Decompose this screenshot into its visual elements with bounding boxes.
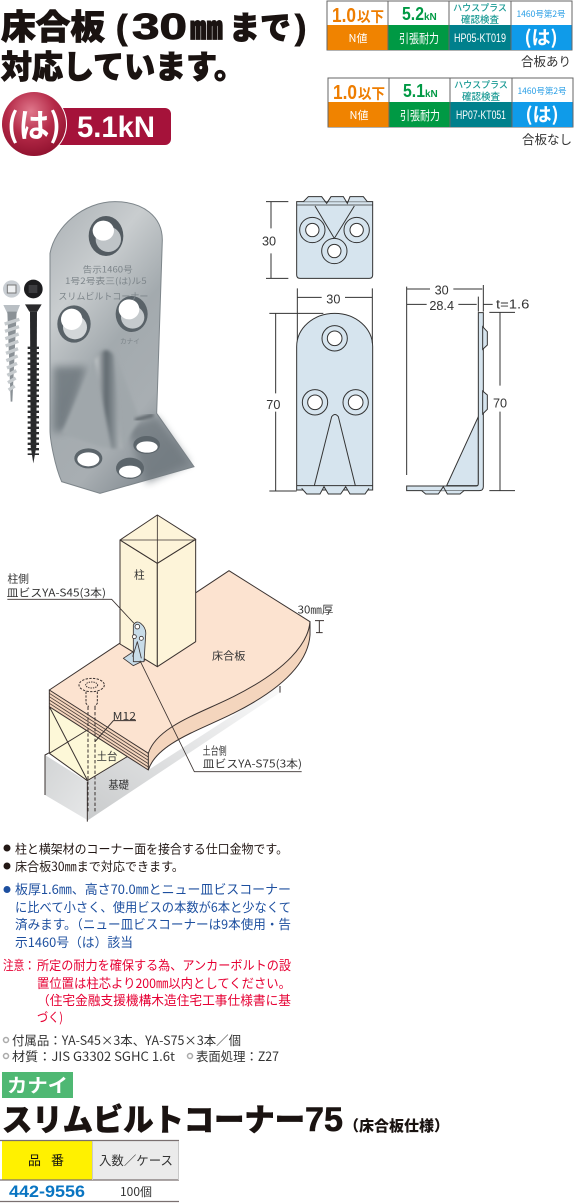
- concrete foundation: [45, 685, 280, 822]
- icon: bracket: 告示1460号: [83, 264, 133, 276]
- drawing: front view: 30: [326, 292, 340, 306]
- icon: bracket: 1号2号表三(は)ル5: [65, 275, 147, 287]
- spec table: with plywood: N値: [349, 30, 367, 46]
- plywood floor: [49, 571, 310, 770]
- labels: 土台側: [203, 743, 227, 758]
- labels: 皿ビスYA-S45(3本): [7, 586, 106, 601]
- feature bullets: 床合板30㎜まで対応できます。: [15, 856, 184, 875]
- title: まで: [229, 3, 291, 49]
- maker tag: カナイ: [7, 1071, 68, 1098]
- spec table: with plywood: 1.0: [332, 5, 356, 27]
- red caution text: づく): [37, 1007, 63, 1026]
- spec table: without plywood: kN: [425, 89, 438, 100]
- blue feature text: 示1460号（は）該当: [15, 932, 133, 951]
- icon: bracket: スリムビルトコーナー: [58, 288, 148, 302]
- title: ): [295, 9, 306, 47]
- title: 床合板: [1, 0, 105, 49]
- sill: [49, 707, 128, 781]
- product table: 番: [51, 1150, 64, 1169]
- spec table: without plywood: ハウスプラス: [454, 78, 508, 91]
- product table: 品: [28, 1150, 41, 1169]
- spec table: with plywood: 1460号第2号: [516, 8, 566, 20]
- red caution text: 所定の耐力を確保する為、アンカーボルトの設: [37, 955, 291, 974]
- technical drawings: [262, 197, 529, 494]
- spec table: without plywood: [328, 78, 573, 127]
- drawing: front view: 70: [266, 398, 280, 412]
- spec table: with plywood: (は): [524, 23, 558, 50]
- spec table: without plywood: 以下: [358, 83, 385, 104]
- labels: 柱側: [7, 572, 29, 587]
- label: with plywood: 合板あり: [521, 51, 571, 70]
- icon: bracket: [50, 202, 194, 493]
- icon: black screw: [24, 280, 43, 463]
- labels: 基礎: [108, 777, 129, 792]
- labels: M12: [113, 709, 136, 724]
- title: 30: [132, 6, 187, 47]
- product table: 入数／ケース: [99, 1150, 173, 1169]
- post: [120, 515, 196, 667]
- red caution text: [3, 955, 291, 1026]
- title: (: [116, 9, 128, 47]
- badge: (は) 5.1kN: [1, 91, 171, 157]
- product table: [0, 1140, 179, 1202]
- blue feature text: に比べて小さく、使用ビスの本数が6本と少なくて: [15, 897, 291, 916]
- accessories and material: 材質：JIS G3302 SGHC 1.6t: [12, 1046, 175, 1065]
- product name: スリムビルトコーナー: [2, 1095, 305, 1140]
- drawing: top view: 30: [262, 234, 276, 248]
- spec table: without plywood: 5.1: [403, 81, 425, 101]
- drawing: side view: 30: [435, 284, 449, 298]
- spec table: with plywood: 5.2: [402, 4, 424, 24]
- drawing: side view: t=1.6: [496, 298, 529, 312]
- small bracket: [7, 599, 302, 772]
- blue feature text: 済みます。（ニュー皿ビスコーナーは9本使用・告: [15, 914, 291, 933]
- spec table: with plywood: [327, 1, 572, 50]
- red caution text: 置位置は柱芯より200㎜以内としてください。: [37, 973, 291, 992]
- spec table: without plywood: HP07-KT051: [456, 108, 506, 122]
- title: ㎜: [190, 3, 223, 49]
- spec table: with plywood: 確認検査: [461, 12, 499, 26]
- feature bullets: 柱と横架材のコーナー面を接合する仕口金物です。: [15, 838, 288, 858]
- spec table: without plywood: N値: [350, 107, 368, 123]
- spec table: without plywood: 1.0: [333, 82, 357, 104]
- labels: 柱: [134, 567, 145, 582]
- product name: 75: [305, 1101, 343, 1139]
- labels: [7, 567, 334, 792]
- badge: (は) 5.1kN: 5.1kN: [77, 111, 155, 144]
- photo: screws and bracket: [3, 202, 194, 493]
- icon: bracket: カナイ: [120, 335, 140, 345]
- anchor bolt M12: [79, 678, 136, 812]
- drawing: side view: [407, 284, 529, 494]
- badge: (は) 5.1kN: (は): [7, 99, 61, 147]
- title: 対応しています。: [1, 42, 245, 88]
- spec table: with plywood: HP05-KT019: [454, 31, 506, 45]
- spec table: without plywood: 引張耐力: [400, 105, 440, 124]
- blue feature text: 板厚1.6㎜、高さ70.0㎜とニュー皿ビスコーナー: [15, 879, 291, 898]
- spec table: with plywood: ハウスプラス: [453, 1, 507, 14]
- spec table: without plywood: 確認検査: [462, 89, 500, 103]
- product table: 442-9556: [9, 1182, 85, 1201]
- feature bullets: [4, 838, 288, 875]
- red caution text: 注意：: [3, 955, 35, 974]
- accessories and material: 表面処理：Z27: [196, 1046, 279, 1065]
- product name: [2, 1095, 449, 1140]
- labels: 土台: [97, 749, 118, 764]
- drawing: front view: [266, 288, 373, 494]
- drawing: top view: [262, 197, 373, 278]
- product table: 100個: [120, 1183, 152, 1200]
- spec table: without plywood: (は): [525, 100, 559, 127]
- title: [1, 0, 306, 88]
- dimension 30mm thick: [315, 621, 324, 633]
- isometric installation diagram: [7, 515, 334, 822]
- label: without plywood: 合板なし: [522, 129, 572, 148]
- labels: 30㎜厚: [298, 602, 334, 617]
- spec table: with plywood: 引張耐力: [399, 28, 439, 47]
- icon: silver screw: [3, 280, 20, 402]
- labels: 床合板: [212, 649, 246, 664]
- drawing: side view: 70: [493, 396, 507, 410]
- spec table: without plywood: 1460号第2号: [517, 85, 567, 97]
- blue feature text: [4, 879, 291, 951]
- labels: 皿ビスYA-S75(3本): [203, 756, 302, 771]
- accessories and material: 付属品：YA-S45×3本、YA-S75×3本／個: [12, 1030, 241, 1049]
- drawing: side view: 28.4: [429, 299, 454, 313]
- accessories and material: [4, 1030, 279, 1065]
- spec table: with plywood: kN: [424, 12, 437, 23]
- red caution text: （住宅金融支援機構木造住宅工事仕様書に基: [37, 990, 291, 1009]
- product name: （床合板仕様）: [344, 1115, 449, 1136]
- spec table: with plywood: 以下: [357, 6, 384, 27]
